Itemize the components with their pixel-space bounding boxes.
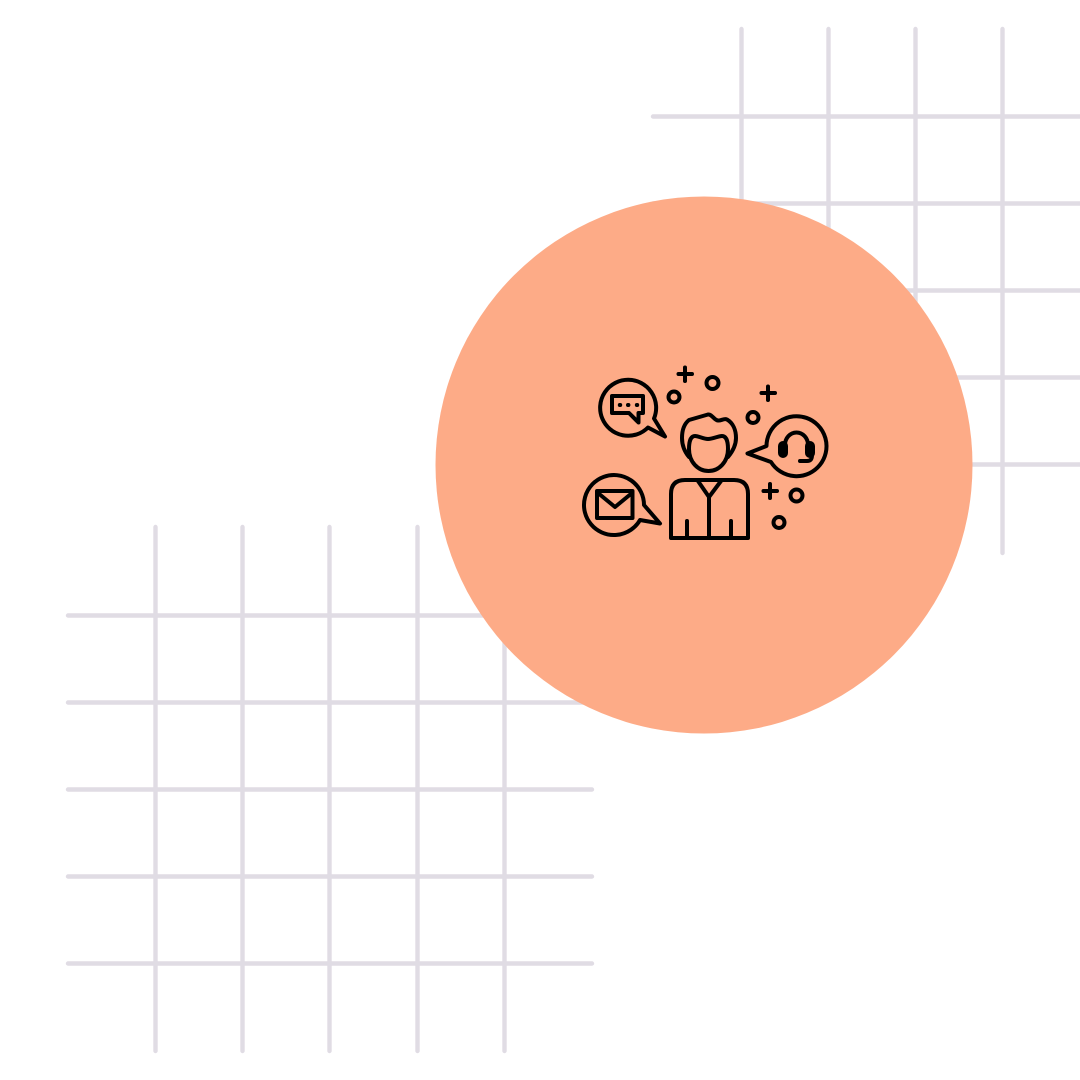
icon: sparkle plus signs xyxy=(678,368,777,498)
orange circle xyxy=(436,196,972,734)
icon: person xyxy=(671,414,748,538)
icon: customer support group xyxy=(584,368,826,538)
icon: sparkle rings xyxy=(668,377,802,528)
grid: top right xyxy=(653,29,1080,553)
grid: bottom left xyxy=(68,527,592,1051)
icon: headset bubble xyxy=(748,416,826,476)
icon: mail bubble xyxy=(584,475,660,535)
icon: chat bubble xyxy=(600,380,665,436)
